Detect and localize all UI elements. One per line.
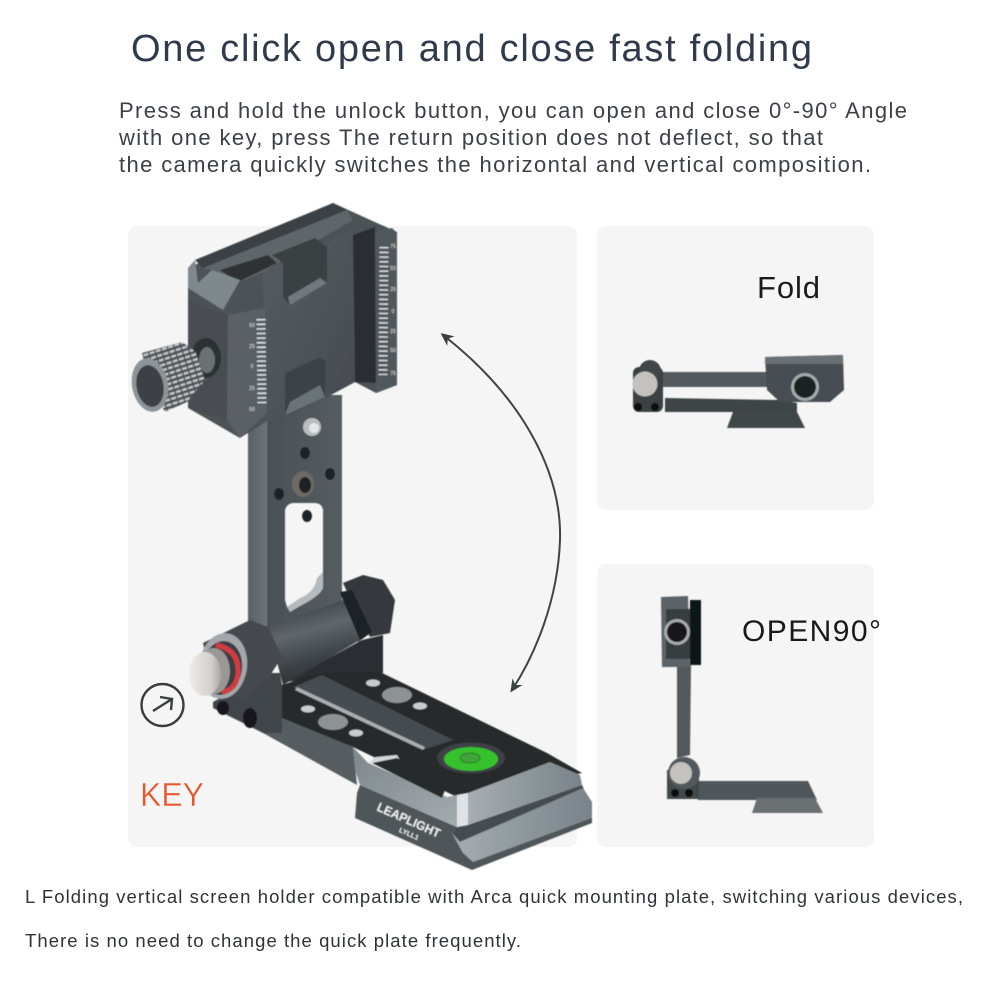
folded base wedge [727,412,805,428]
title: One click open and close fast folding [131,28,812,70]
clamp: upper cutout [272,238,327,305]
clamp: right scale rail: 25 [390,329,396,335]
clamp: main face [263,233,355,420]
stem holes [274,447,335,522]
clamp: lower cutout [285,357,326,415]
caption text block [25,886,963,951]
caption text block: L Folding vertical screen holder compatible with Arca quick mounting plate, switching various devices, [25,886,963,907]
hinge neck [340,590,372,642]
base plate: front label face [355,785,592,870]
brand label: LEAPLIGHT [375,800,443,841]
base plate: holes [301,680,427,736]
folded hinge end [632,360,663,412]
thumbnail: folded bracket [632,355,844,428]
clamp: right scale rail: 75 [390,244,396,250]
clamp: top slot [220,255,277,282]
clamp: base silhouette [188,203,397,438]
intro text block: the camera quickly switches the horizontal and vertical composition. [119,152,871,177]
folded clamp [765,355,844,402]
bubble level [437,742,505,774]
lower-left hinge block [213,673,282,733]
stem slot bevel [287,572,323,612]
clamp: right channel [353,227,377,383]
intro text block: Press and hold the unlock button, you can open and close 0°-90° Angle [119,98,907,123]
clamp: right scale rail: 0 [392,309,395,315]
clamp: left block side [188,300,228,420]
clamp: top ridge [195,203,347,268]
brand label: LYLL1 [398,827,420,842]
red ring [216,645,238,692]
clamp: lower cutout bevel [285,385,325,415]
curved double arrow [443,335,560,690]
clamp: right scale rail: 75 [390,371,396,377]
base plate: right silver facet [468,762,582,825]
clamp: screw [303,418,321,436]
thumbnail: open 90 bracket [661,596,823,813]
clamp: left scale block: 50 [249,407,255,413]
base plate: dark band [452,785,584,842]
panel: fold [597,226,874,510]
clamp: left scale block: 25 [249,344,255,350]
base plate: left silver bevel [353,747,457,827]
label: Fold: Fold [757,270,820,305]
clamp: neck [191,338,221,378]
caption text block: There is no need to change the quick plate frequently. [25,930,521,951]
collar ring [195,630,251,702]
clamp: right scale rail [375,228,397,393]
clamp: left scale block: 25 [249,386,255,392]
intro text block [118,98,907,177]
hinge collar [203,620,282,700]
base plate: lower silver bevel [452,788,592,862]
folded arm [663,372,767,387]
clamp: right scale rail: 50 [390,348,396,354]
base plate: notch [368,755,448,798]
open hinge [667,757,700,799]
base plate: bright corner [457,793,468,827]
base plate: side rail [263,707,357,785]
clamp: upper cutout bevel [288,278,327,305]
base plate: top [282,672,582,797]
panel: open 90 [597,564,874,847]
folded base plate [665,398,797,412]
hinge block holes [217,701,257,728]
base plate: channel [293,675,453,750]
unlock button [189,648,230,696]
open base wedge [752,798,823,813]
clamp: right scale rail: 50 [390,266,396,272]
product: folding bracket [128,203,592,870]
open base plate [698,781,817,800]
clamp: knurled knob [128,342,205,415]
panel: main product [128,226,577,847]
rear bracket [285,635,383,682]
intro text block: with one key, press The return position does not deflect, so that [118,125,823,150]
icon: circled arrow [142,684,184,726]
open stem [677,665,691,758]
clamp: left bevel top [188,260,240,310]
vertical stem [248,395,342,645]
clamp: left scale block: 0 [251,364,254,370]
hinge cylinder [268,600,360,685]
clamp: left scale block [227,308,267,438]
label: KEY: KEY [140,776,204,813]
collar inner [198,638,246,698]
clamp: right scale rail: 25 [390,287,396,293]
open clamp [661,596,701,667]
label: OPEN90: OPEN90° [742,615,881,648]
end cap [343,575,395,637]
clamp: top face [203,210,353,282]
clamp: left scale block: 50 [249,323,255,329]
